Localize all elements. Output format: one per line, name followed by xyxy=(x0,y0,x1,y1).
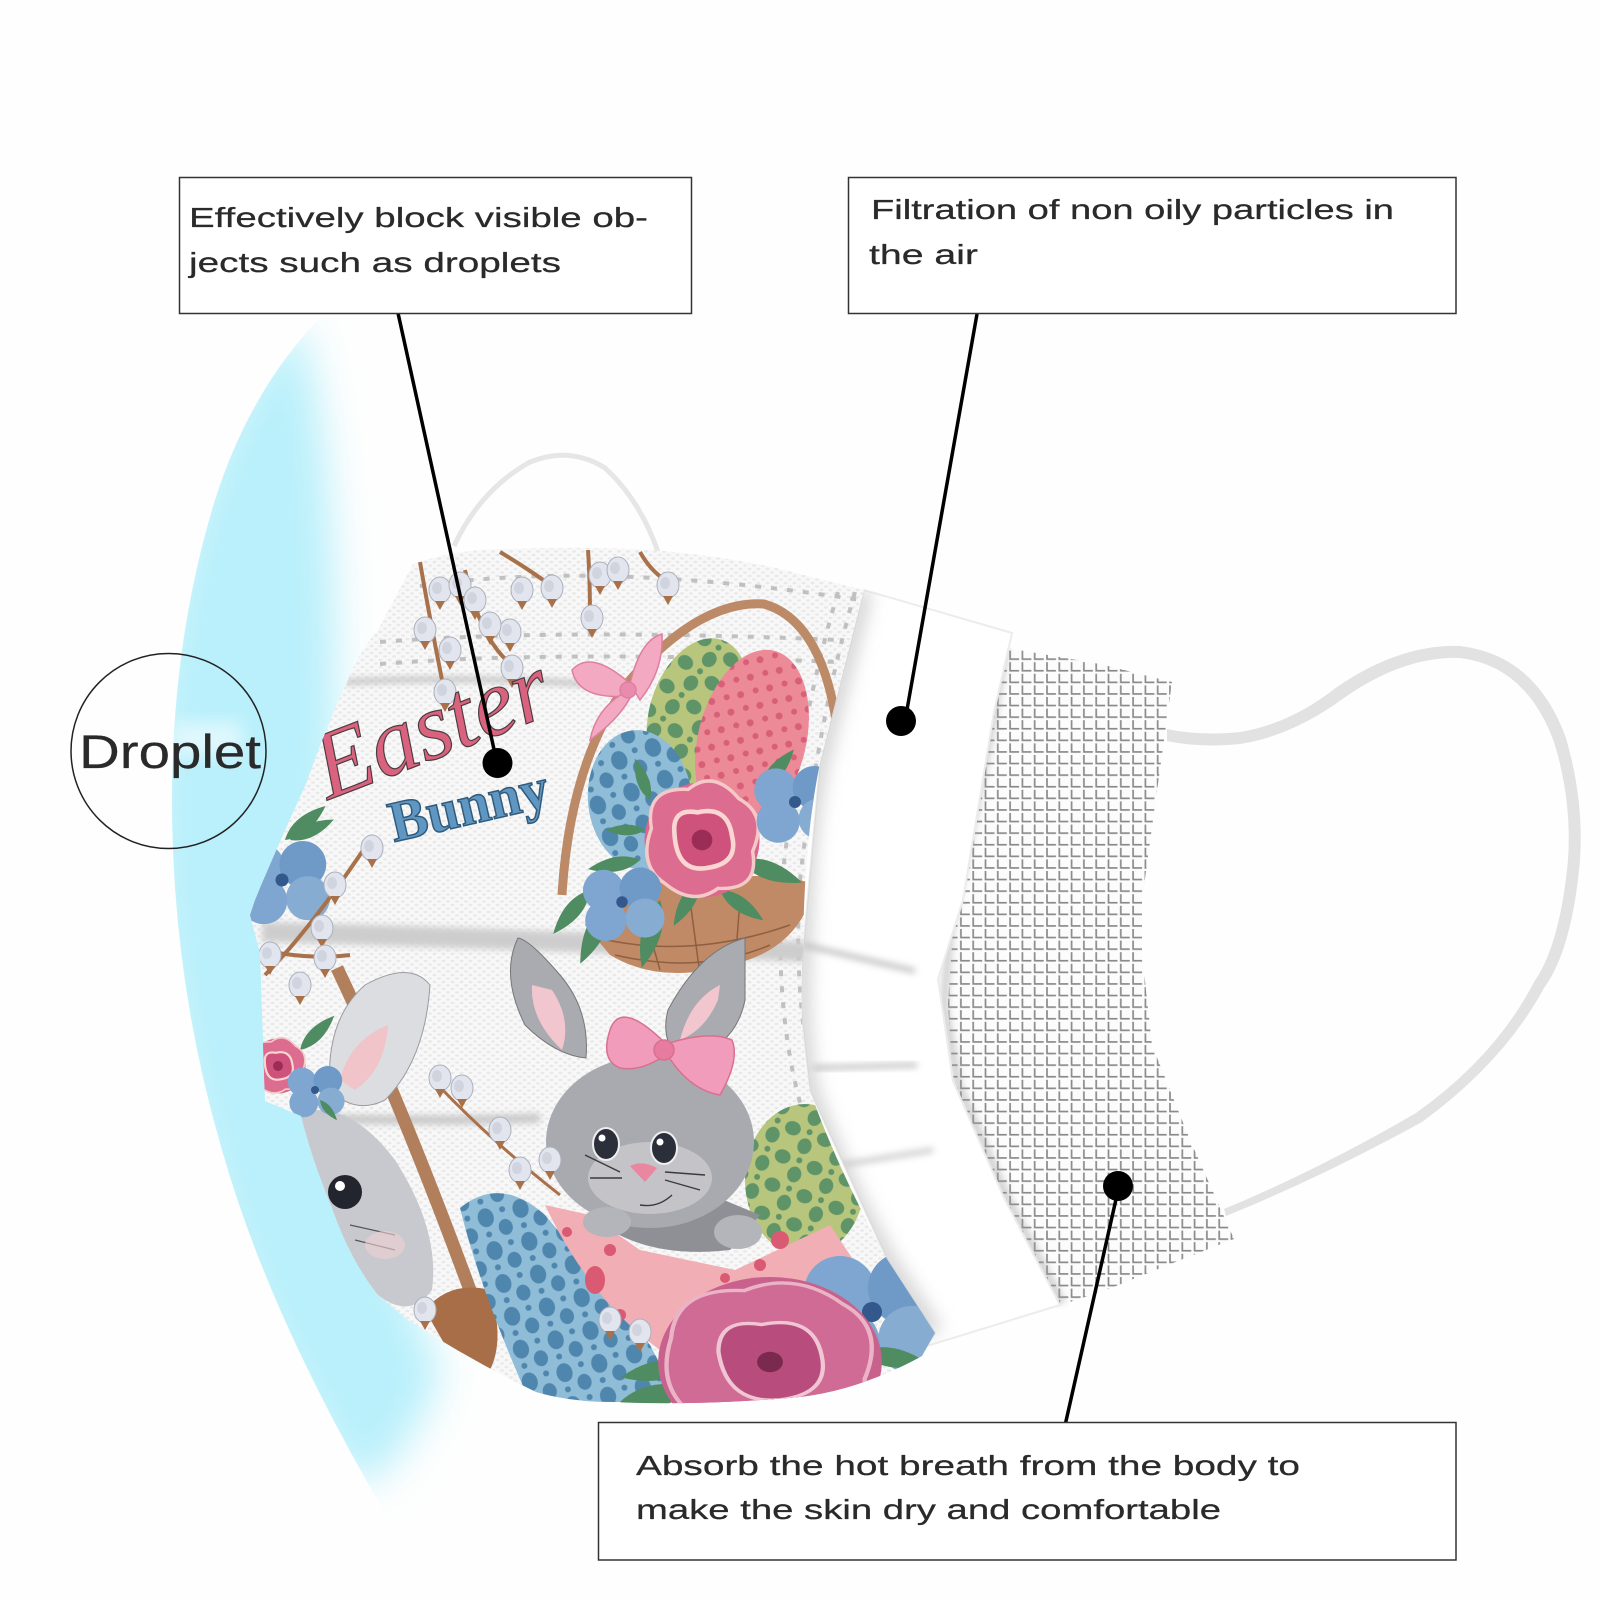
pleat shadows xyxy=(262,679,810,1120)
callout box: block droplets: Effectively block visible ob- xyxy=(189,202,648,233)
center willow branch xyxy=(429,1065,651,1352)
callout line: outer layer xyxy=(398,313,497,763)
callout box: block droplets: jects such as droplets xyxy=(188,247,561,278)
callout line: middle layer xyxy=(905,314,977,721)
basket handle xyxy=(562,604,836,895)
callout box: filtration: Filtration of non oily particles in xyxy=(871,194,1394,225)
basket stick behind left bunny xyxy=(337,968,470,1290)
egg: blue xyxy=(588,730,690,870)
ear loop: top xyxy=(454,455,658,552)
droplet label circle: Droplet xyxy=(79,725,261,778)
basket rose xyxy=(644,781,760,898)
mesh grid texture xyxy=(948,648,1234,1305)
center bunny nose and whiskers xyxy=(585,1155,705,1206)
egg: large blue xyxy=(460,1193,680,1402)
callout box: block droplets xyxy=(180,178,692,314)
basket weave lines xyxy=(608,908,790,970)
egg: pink xyxy=(695,650,809,815)
bow on basket xyxy=(572,634,662,740)
callout box: absorb breath: Absorb the hot breath from the body to xyxy=(636,1450,1300,1481)
basket knot xyxy=(414,1288,498,1370)
willow branches: top xyxy=(418,550,661,680)
fabric weave xyxy=(250,548,893,1385)
left willow branches xyxy=(264,850,362,976)
droplet label circle xyxy=(71,654,266,848)
bottom flowers xyxy=(618,1252,946,1447)
stitching perforations xyxy=(380,576,860,1110)
center bunny cheeks and muzzle xyxy=(588,1142,712,1214)
center bunny ears xyxy=(510,938,745,1060)
egg: green xyxy=(646,638,742,784)
Bunny lettering: Bunny xyxy=(382,755,555,855)
printed outer mask face xyxy=(238,540,946,1447)
mesh shaded edge xyxy=(944,650,1062,1303)
pink egg spots xyxy=(562,1227,789,1321)
basket body xyxy=(585,876,815,973)
top-left leaves and blue flower xyxy=(250,806,334,924)
center bunny paws xyxy=(583,1207,762,1249)
callout dot: outer layer xyxy=(482,748,512,778)
center bunny bow xyxy=(607,1017,734,1095)
callout box: filtration xyxy=(848,178,1456,314)
callout box: absorb breath xyxy=(598,1422,1456,1560)
callout line: inner layer xyxy=(1064,1186,1119,1430)
egg: green lower xyxy=(745,1104,860,1246)
center bunny head xyxy=(546,1056,754,1228)
center bunny body xyxy=(619,1200,760,1252)
willow catkins: top xyxy=(414,557,679,712)
white inner panel of mask xyxy=(800,590,1060,1346)
basket blue flowers xyxy=(583,868,665,941)
left bunny xyxy=(300,972,433,1306)
callout box: filtration: the air xyxy=(869,239,978,270)
Easter lettering: Easter xyxy=(295,632,565,820)
left willow catkins xyxy=(259,835,383,1005)
ear loop: right xyxy=(1167,646,1581,1216)
callout dot: inner layer xyxy=(1103,1171,1133,1201)
callout dot: middle layer xyxy=(886,706,916,736)
basket leaves xyxy=(547,745,805,970)
droplet spray crescent xyxy=(150,320,440,1480)
center bunny eyes xyxy=(593,1128,677,1164)
left bunny flower crown xyxy=(263,1016,345,1120)
inner mesh layer xyxy=(948,648,1234,1305)
broken pink egg xyxy=(545,1205,860,1350)
callout box: absorb breath: make the skin dry and comfortable xyxy=(636,1494,1221,1525)
